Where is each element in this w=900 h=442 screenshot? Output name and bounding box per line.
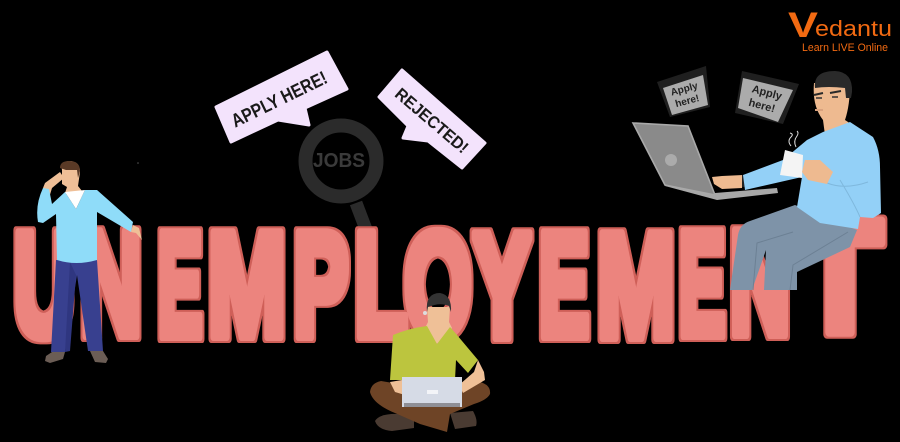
logo: Vedantu: Learn LIVE Online [802,42,888,54]
speech bubble: apply here: APPLY HERE! [228,68,331,132]
headline word: UNEMPLOYEMENT: M [597,204,675,366]
headline word: UNEMPLOYEMENT: N [80,203,142,365]
headline word: UNEMPLOYEMENT: T [798,190,882,364]
headline word: UNEMPLOYEMENT: M [208,203,286,365]
hand holding mug [802,160,833,184]
forearm hand on keyboard [712,175,743,189]
browser window: apply here right: here! [747,97,776,115]
headline word: UNEMPLOYEMENT: Y [473,205,531,367]
coffee mug and steam [780,131,803,178]
laptop [633,123,778,200]
magnifying glass with JOBS: JOBS [313,150,365,172]
headline word: UNEMPLOYEMENT: L [354,205,408,366]
logo: Vedantu: edantu [815,16,892,41]
logo: Vedantu: V [788,6,819,45]
trousers [730,205,857,290]
browser window: apply here left: Apply [670,81,700,98]
person: standing man, hand on forehead [37,161,142,363]
person: cross-legged man with laptop [370,293,490,432]
person: man with laptop sitting on the T [633,71,881,290]
headline word: UNEMPLOYEMENT: E [679,203,725,365]
speech bubble: rejected [379,70,485,168]
browser window: apply here right: Apply [750,83,784,103]
speech bubble: rejected: REJECTED! [391,84,472,157]
neck and face [814,83,851,135]
browser window: apply here left: here! [674,93,701,110]
headline word: UNEMPLOYEMENT: E [539,204,589,366]
headline word: UNEMPLOYEMENT [14,190,882,367]
browser window: apply here right [735,71,799,124]
browser window: apply here left [657,66,710,117]
headline word: UNEMPLOYEMENT: N [730,203,790,364]
headline word: UNEMPLOYEMENT: E [158,203,202,365]
headline word: UNEMPLOYEMENT: U [14,205,74,366]
sweater [743,122,881,229]
headline word: UNEMPLOYEMENT: P [293,204,349,366]
headline word: UNEMPLOYEMENT: O [404,205,472,366]
magnifying glass with JOBS [306,126,376,232]
logo: Vedantu [788,6,892,54]
